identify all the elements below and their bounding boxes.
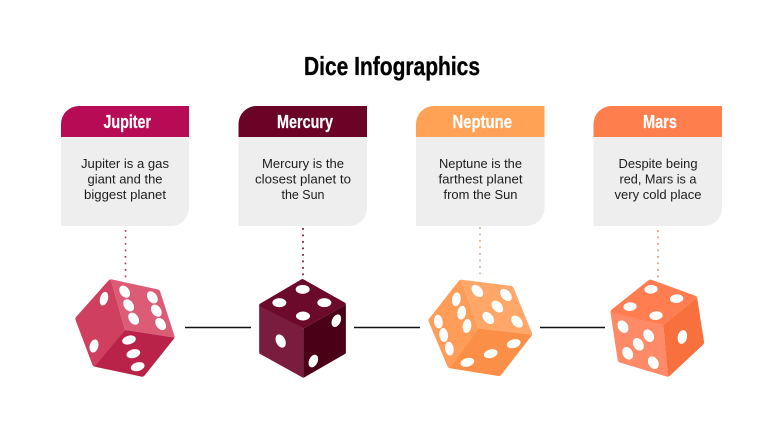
card header xyxy=(416,106,544,137)
icon: Neptune die xyxy=(428,280,532,376)
description: Despite being xyxy=(618,156,698,171)
dotted connector: Mars xyxy=(657,230,659,279)
description: giant and the xyxy=(88,172,162,186)
description: farthest planet xyxy=(438,172,523,186)
description: very cold place xyxy=(614,187,702,202)
description: Mercury is the xyxy=(262,156,344,171)
dotted connector: Neptune xyxy=(479,227,481,279)
card header xyxy=(594,106,722,137)
description: biggest planet xyxy=(84,187,166,202)
dotted connector: Jupiter xyxy=(124,230,126,279)
icon: Mercury die xyxy=(257,277,348,380)
description: the Sun xyxy=(282,187,324,202)
description: red, Mars is a xyxy=(620,172,697,186)
panel: Mars xyxy=(594,106,722,226)
description: from the Sun xyxy=(444,187,518,202)
panel: Neptune xyxy=(416,106,544,226)
connector line 1 xyxy=(185,326,251,328)
icon: Jupiter die xyxy=(75,279,175,377)
title: Dice Infographics xyxy=(304,51,480,81)
heading: Jupiter xyxy=(104,112,151,132)
card body xyxy=(594,137,722,226)
panel: Mercury xyxy=(238,106,367,226)
icon: Mars die xyxy=(610,280,704,377)
card body xyxy=(416,137,544,226)
connector line 2 xyxy=(354,326,420,328)
panel: Jupiter xyxy=(61,106,189,226)
card body xyxy=(238,137,367,226)
heading: Mercury xyxy=(277,112,333,132)
connector line 3 xyxy=(540,326,605,328)
heading: Neptune xyxy=(452,112,512,132)
description: closest planet to xyxy=(255,172,351,186)
description: Neptune is the xyxy=(439,156,522,171)
heading: Mars xyxy=(643,112,677,132)
dotted connector: Mercury xyxy=(302,228,304,278)
card header xyxy=(61,106,189,137)
description: Jupiter is a gas xyxy=(81,156,169,171)
card body xyxy=(61,137,189,226)
card header xyxy=(238,106,367,137)
